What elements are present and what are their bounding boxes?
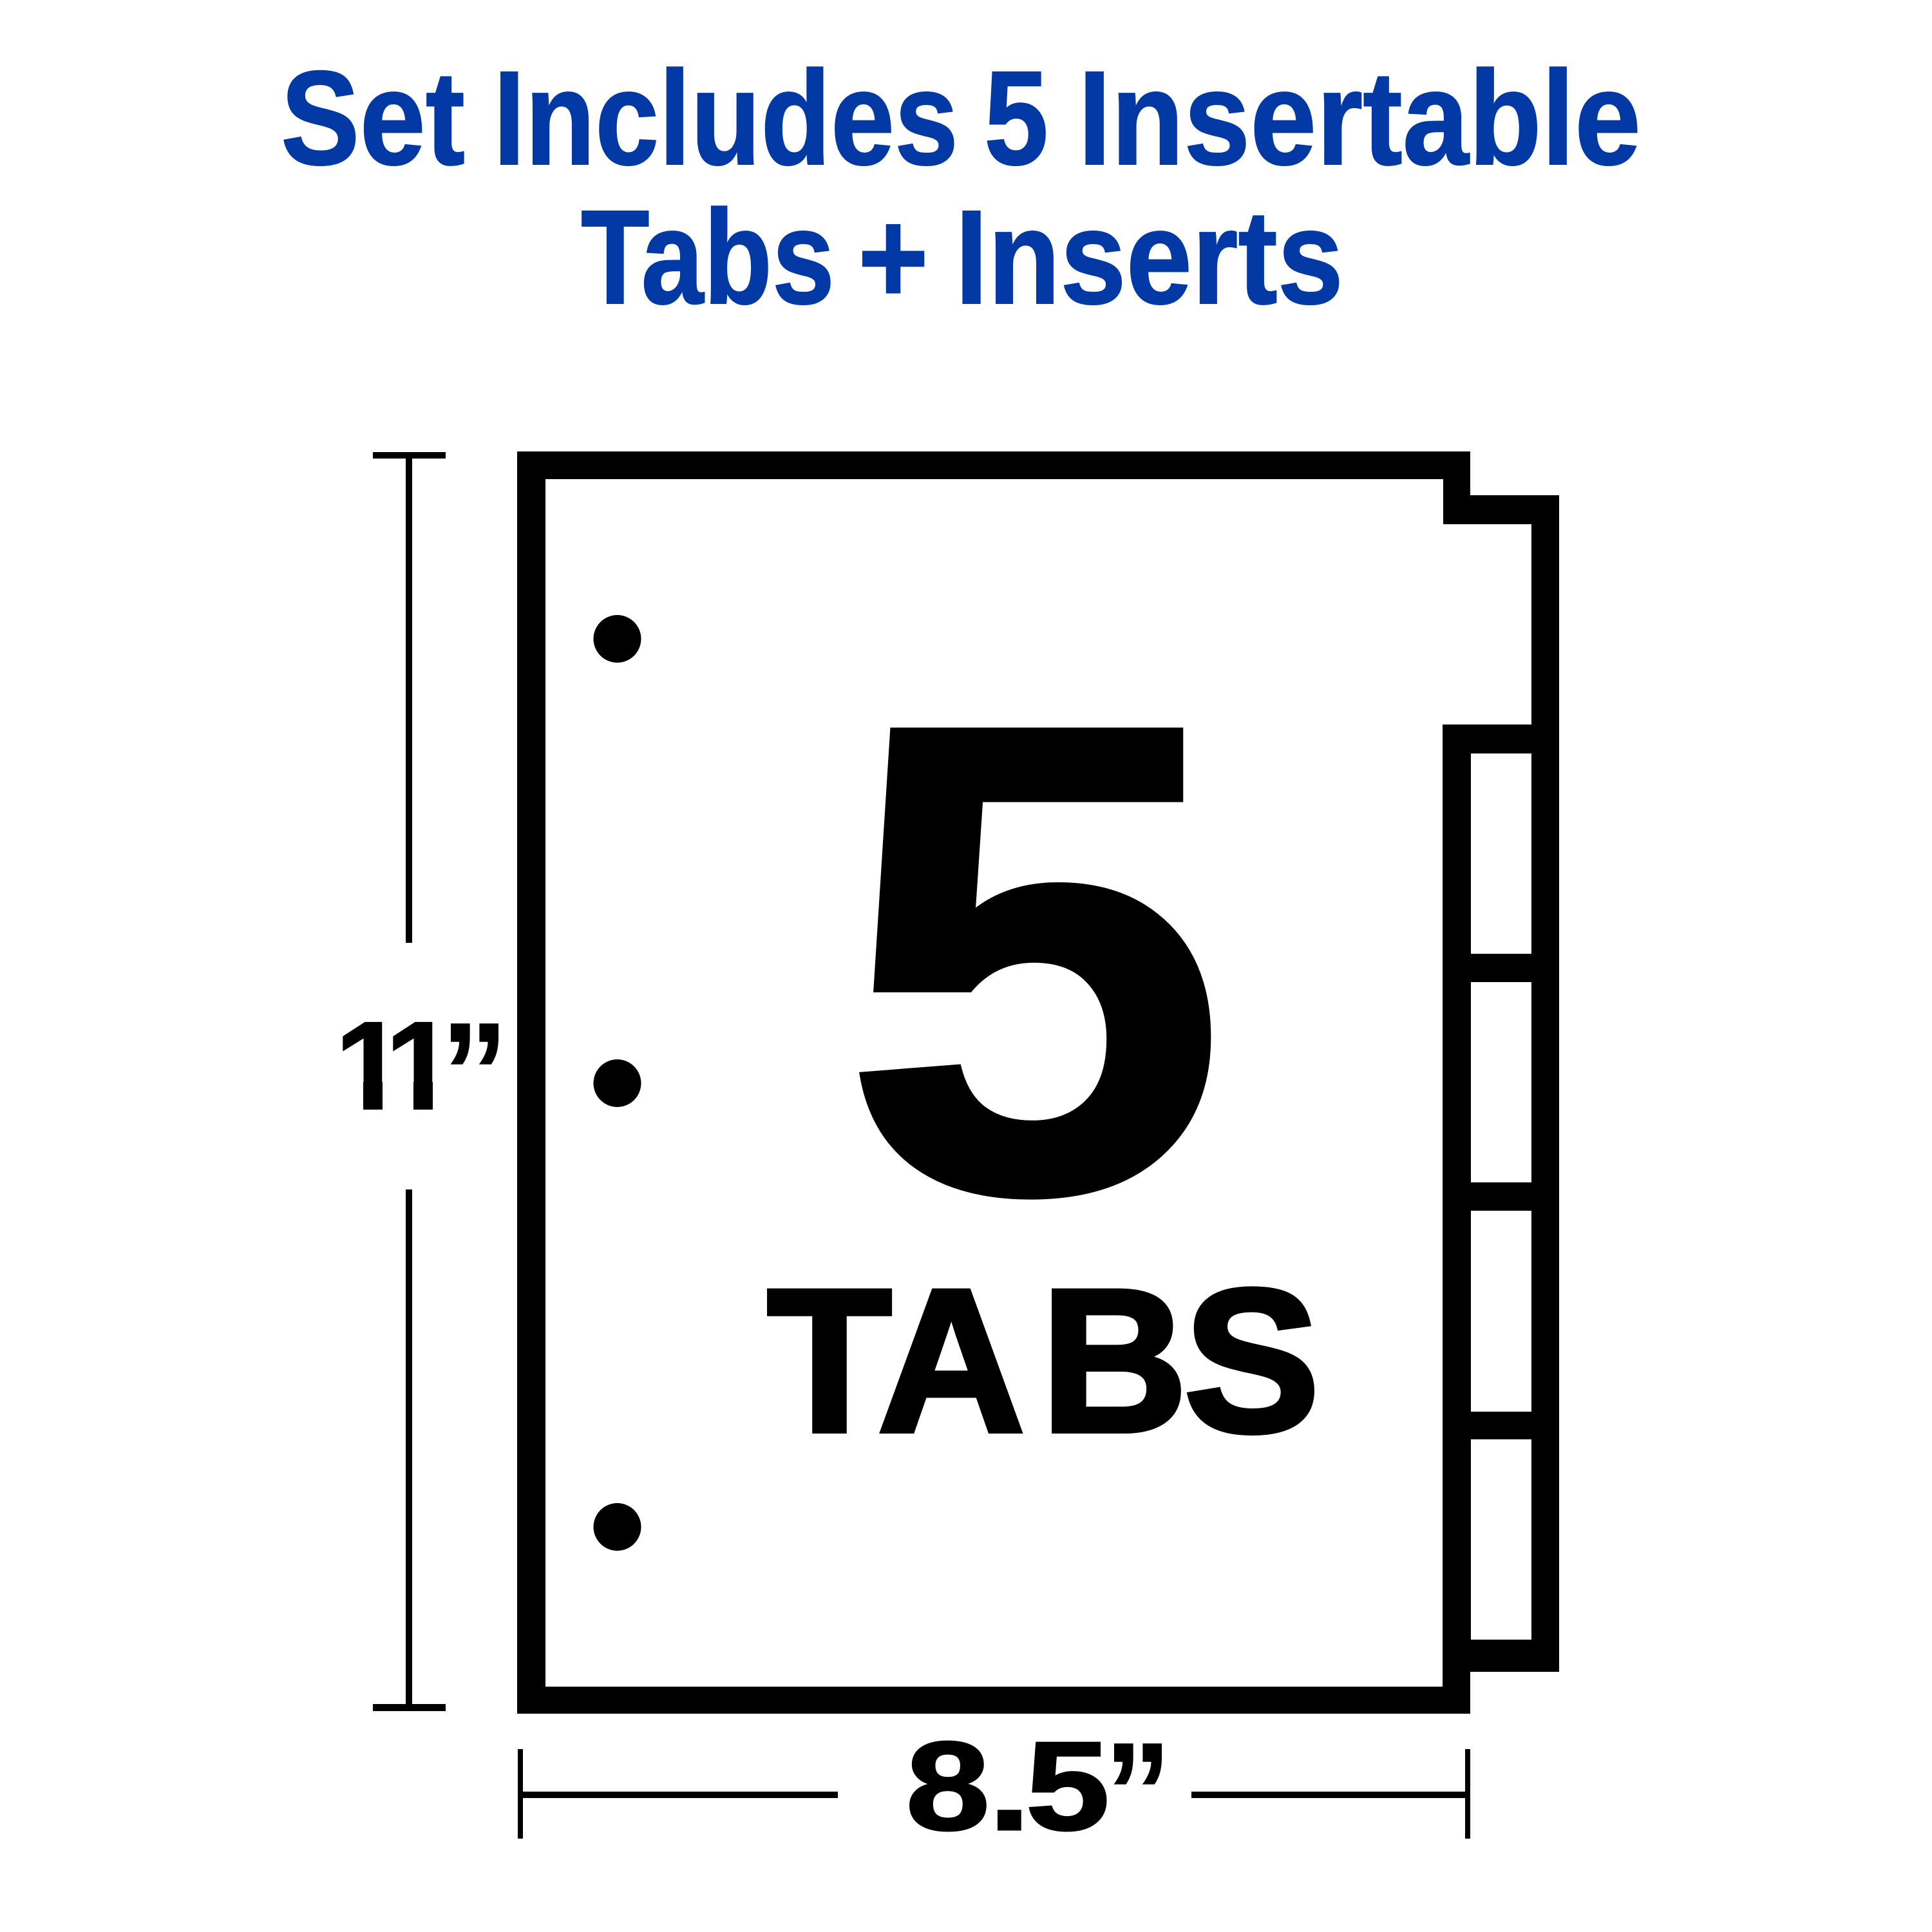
title line 1: Insertable bbox=[1078, 44, 1641, 193]
top cap and upper line bbox=[373, 452, 446, 943]
8.5 inch label bbox=[905, 1712, 1172, 1874]
title line 1: 5 bbox=[984, 44, 1048, 193]
title line 1: Includes bbox=[493, 44, 958, 193]
title line 2: Tabs bbox=[581, 183, 835, 332]
8.5 inch label: 8.5 bbox=[905, 1716, 1110, 1857]
large number 5: 5 bbox=[842, 585, 1227, 1331]
width dimension bbox=[518, 1712, 1470, 1874]
TABS label: TABS bbox=[768, 1247, 1320, 1474]
left cap and line bbox=[518, 1749, 838, 1839]
title line 1 bbox=[281, 44, 1641, 193]
11 inch label bbox=[328, 992, 509, 1154]
title line 2: + bbox=[858, 183, 929, 332]
height dimension bbox=[328, 452, 509, 1711]
binder holes bbox=[594, 615, 641, 1551]
11 inch label: 11 bbox=[335, 996, 455, 1136]
11 inch label: ” bbox=[440, 992, 509, 1154]
lower line and bottom cap bbox=[373, 1189, 446, 1711]
title bbox=[281, 44, 1641, 332]
title line 1: Set bbox=[281, 44, 465, 193]
right line and cap bbox=[1191, 1749, 1470, 1839]
title line 2 bbox=[581, 183, 1343, 332]
divider page outline with tabs bbox=[517, 451, 1559, 1714]
title line 2: Inserts bbox=[955, 183, 1343, 332]
8.5 inch label: ” bbox=[1104, 1712, 1172, 1874]
